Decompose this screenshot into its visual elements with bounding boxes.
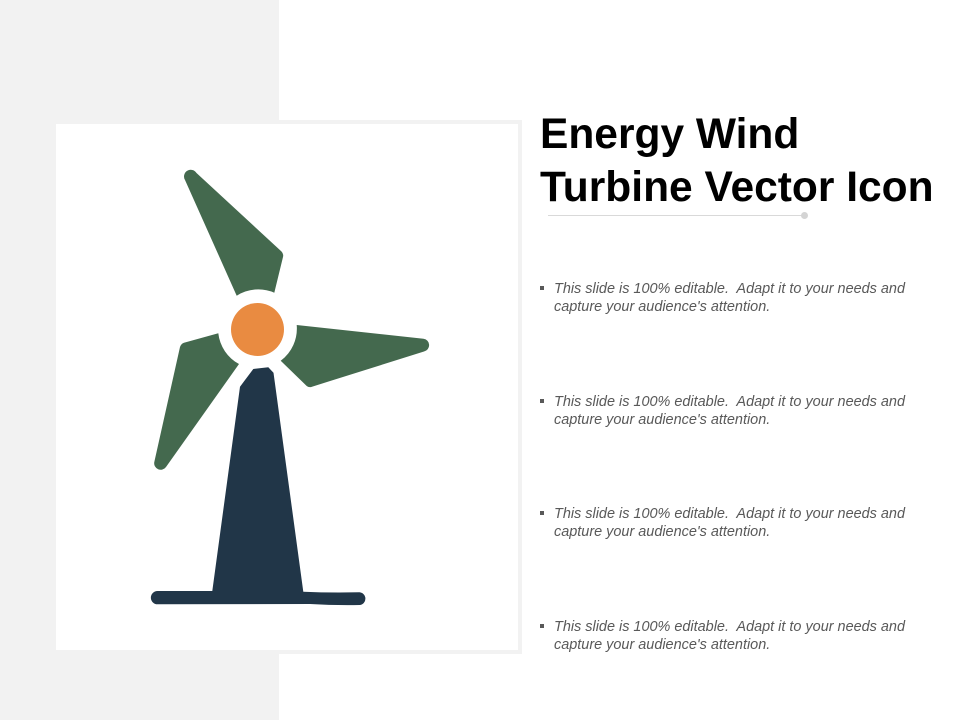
icon: top blade: [184, 170, 283, 296]
title: [540, 111, 934, 211]
title: Energy Wind: [540, 111, 799, 158]
title divider with dot: [548, 212, 808, 219]
text block 1: This slide is 100% editable. Adapt it to your needs and capture your audience's attention.: [554, 281, 905, 315]
panel: white icon card: [56, 124, 518, 650]
title: Turbine Vector Icon: [540, 164, 934, 211]
panel: icon frame: [279, 120, 522, 654]
icon: right blade: [281, 325, 429, 387]
icon: orange hub: [231, 303, 284, 356]
text block 2: This slide is 100% editable. Adapt it to your needs and capture your audience's attention.: [554, 394, 905, 428]
icon: left blade: [154, 333, 239, 470]
icon: tower and base: [151, 367, 365, 605]
text block 3: This slide is 100% editable. Adapt it to your needs and capture your audience's attention.: [554, 506, 905, 540]
panel: left grey background band: [0, 0, 279, 720]
text block 4: This slide is 100% editable. Adapt it to your needs and capture your audience's attention.: [554, 619, 905, 653]
